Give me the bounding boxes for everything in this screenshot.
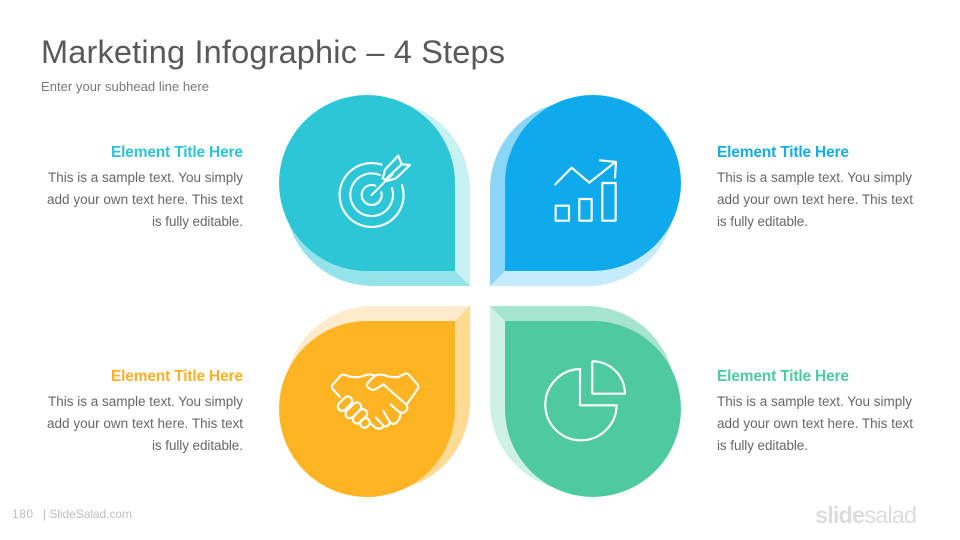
panel: top-left petal	[279, 95, 470, 286]
left face	[490, 105, 671, 286]
text block: top-right	[717, 144, 913, 229]
text block: top-left	[47, 144, 243, 229]
front face	[279, 95, 455, 271]
title: Marketing Infographic – 4 Steps	[41, 34, 505, 70]
text block: bottom-right	[717, 368, 913, 453]
bottom face	[289, 224, 470, 286]
text block: top-right: Element Title Here	[717, 144, 849, 161]
text block: top-left: is fully editable.	[152, 214, 243, 229]
front face	[505, 321, 681, 497]
right face	[289, 105, 470, 286]
text block: top-right: is fully editable.	[717, 214, 808, 229]
text block: top-left: Element Title Here	[111, 144, 243, 161]
icon: pie chart	[545, 361, 625, 440]
panel: top-right petal	[490, 95, 681, 286]
icon: growth chart	[555, 160, 616, 221]
panel: bottom-right petal	[490, 306, 681, 497]
footer: page number and site: 180	[12, 507, 33, 521]
top face	[490, 306, 671, 368]
left face	[490, 306, 671, 487]
text block: bottom-left: This is a sample text. You simply	[48, 394, 243, 409]
text block: bottom-left: add your own text here. This text	[47, 416, 243, 431]
front face	[505, 95, 681, 271]
text block: bottom-right: Element Title Here	[717, 368, 849, 385]
panel: bottom-left petal	[279, 306, 470, 497]
text block: top-right: This is a sample text. You simply	[717, 170, 912, 185]
text block: top-left: add your own text here. This text	[47, 192, 243, 207]
icon: handshake	[332, 373, 418, 430]
text block: bottom-right: This is a sample text. You simply	[717, 394, 912, 409]
text block: top-left: This is a sample text. You simply	[48, 170, 243, 185]
subhead: Enter your subhead line here	[41, 79, 209, 94]
logo: slidesalad wordmark: slidesalad	[815, 502, 917, 528]
text block: top-right: add your own text here. This text	[717, 192, 913, 207]
text block: bottom-left	[47, 368, 243, 453]
text block: bottom-right: is fully editable.	[717, 438, 808, 453]
text block: bottom-left: is fully editable.	[152, 438, 243, 453]
right face	[289, 306, 470, 487]
footer: page number and site: | SlideSalad.com	[43, 507, 132, 521]
bottom face	[490, 224, 671, 286]
text block: bottom-right: add your own text here. This text	[717, 416, 913, 431]
front face	[279, 321, 455, 497]
top face	[289, 306, 470, 368]
icon: target with arrow	[340, 156, 410, 227]
text block: bottom-left: Element Title Here	[111, 368, 243, 385]
